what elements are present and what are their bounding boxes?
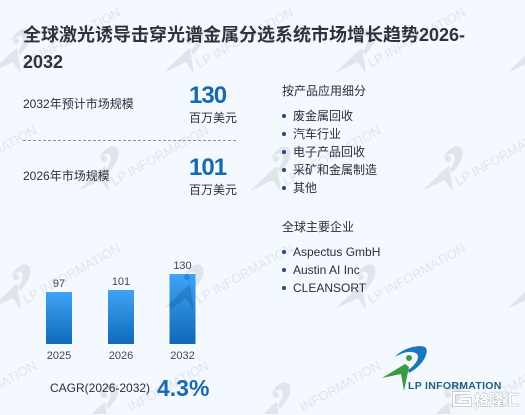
- bar: 2025: [46, 278, 72, 362]
- bar: 2025: 97: [53, 278, 65, 290]
- list: segments: [282, 109, 377, 195]
- value: 2032 market size: 百万美元: [189, 111, 237, 125]
- list: segments: 废金属回收: [293, 109, 353, 123]
- list: segments: 其他: [293, 181, 317, 195]
- CAGR label: CAGR(2026-2032): [50, 381, 150, 395]
- background watermarks: LP INFORMATION: [108, 123, 211, 189]
- list: companies: [282, 245, 380, 295]
- background watermarks: LP INFORMATION: [193, 241, 296, 307]
- label: 2026 market size: 2026年市场规模: [23, 169, 110, 183]
- list: companies: Aspectus GmbH: [293, 245, 380, 259]
- watermark: Gelonghui: 格隆汇: [474, 391, 519, 409]
- logo: LP Information: LP INFORMATION: [408, 380, 502, 392]
- title: 2032: [23, 52, 63, 72]
- list: segments: 采矿和金属制造: [293, 163, 377, 177]
- heading: segments: 按产品应用细分: [282, 84, 366, 98]
- list: companies: CLEANSORT: [293, 281, 366, 295]
- value: 2026 market size: 百万美元: [189, 183, 237, 197]
- bar: 2032: 130: [173, 260, 192, 272]
- bar: 2026: 101: [112, 276, 130, 288]
- background watermarks: INFORMATION: [297, 358, 383, 415]
- panel: key companies: [282, 220, 380, 295]
- value: 2032 market size: [189, 82, 237, 125]
- value: 2026 market size: 101: [189, 154, 226, 181]
- list: segments: 电子产品回收: [293, 145, 365, 159]
- logo: LP Information: [382, 346, 502, 392]
- label: 2032 market size: 2032年预计市场规模: [23, 97, 134, 111]
- bar: 2026: 2026: [109, 350, 133, 362]
- title: 全球激光诱导击穿光谱金属分选系统市场增长趋势2026-: [23, 25, 465, 45]
- background watermarks: LP INFORMATION: [193, 5, 296, 71]
- watermark: Gelonghui: [452, 391, 519, 409]
- CAGR value: 4.3%: [157, 375, 209, 401]
- list: segments: 汽车行业: [293, 127, 341, 141]
- background watermarks: LP INFORMATION: [280, 123, 383, 189]
- value: 2026 market size: [189, 154, 237, 197]
- background watermarks: INFORMATION: [125, 358, 211, 415]
- panel: product application segments: [282, 84, 377, 195]
- dashed divider: [23, 140, 236, 141]
- heading: companies: 全球主要企业: [282, 220, 354, 234]
- background watermarks: LP INFORMATION: [365, 5, 468, 71]
- bar: 2032: [170, 260, 196, 362]
- background watermarks: LP INFORMATION: [365, 241, 468, 307]
- background watermarks: LP INFORMATION: [20, 241, 123, 307]
- value: 2032 market size: 130: [189, 82, 226, 109]
- bar chart: [46, 260, 196, 362]
- bar: 2025: 2025: [47, 350, 71, 362]
- list: companies: Austin AI Inc: [293, 263, 360, 277]
- background watermarks: LP INFORMATION: [20, 5, 123, 71]
- bar: 2026: [108, 276, 134, 362]
- bar: 2032: 2032: [170, 350, 195, 362]
- title: [23, 25, 465, 72]
